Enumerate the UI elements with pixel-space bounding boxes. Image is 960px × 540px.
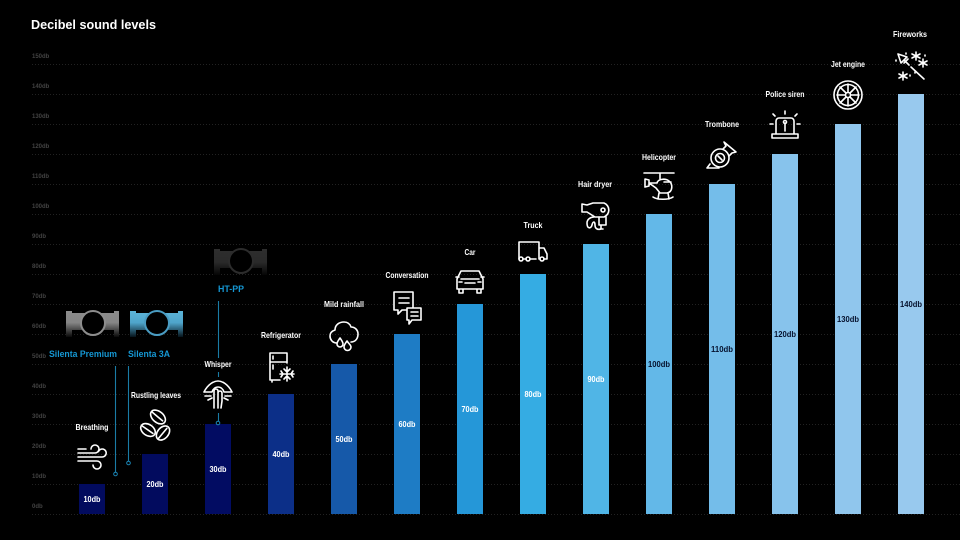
product: Silenta Premium — [49, 311, 119, 476]
item labels: Mild rainfall — [324, 299, 364, 309]
item labels: Breathing — [76, 422, 108, 432]
bar values: 40db — [272, 449, 290, 459]
item labels: Rustling leaves — [131, 390, 181, 400]
icon: rain cloud — [330, 322, 358, 350]
icon: jet engine — [834, 81, 862, 109]
icon: fridge — [270, 353, 294, 382]
bar values: 140db — [900, 299, 922, 309]
y axis grid and labels: 120db — [32, 144, 50, 150]
icon: helicopter — [644, 173, 674, 199]
y axis grid and labels: 80db — [32, 264, 46, 270]
y axis grid and labels: 60db — [32, 324, 46, 330]
item labels: Refrigerator — [261, 330, 302, 340]
y axis grid and labels: 20db — [32, 444, 46, 450]
y axis grid and labels: 0db — [32, 504, 43, 510]
y axis grid and labels: 100db — [32, 204, 50, 210]
y axis grid and labels: 90db — [32, 234, 46, 240]
bar values: 90db — [588, 374, 604, 384]
icon: truck — [519, 242, 547, 261]
item labels: Trombone — [705, 119, 739, 129]
item labels: Conversation — [386, 270, 428, 280]
bars — [79, 94, 924, 514]
bar values: 110db — [711, 344, 733, 354]
icon: conversation — [394, 292, 421, 324]
item labels: Truck — [524, 220, 543, 230]
bar values — [84, 299, 922, 504]
product: Silenta Premium: Silenta Premium — [49, 349, 117, 360]
item labels — [76, 29, 927, 432]
product: HT-PP — [214, 249, 267, 425]
bar values: 120db — [774, 329, 796, 339]
product: Silenta 3A: Silenta 3A — [128, 349, 170, 360]
item labels: Fireworks — [893, 29, 927, 39]
y axis grid and labels: 40db — [32, 384, 46, 390]
icon: breath wind — [78, 445, 106, 469]
bar values: 60db — [398, 419, 416, 429]
y axis grid and labels: 130db — [32, 114, 50, 120]
product: HT-PP: HT-PP — [218, 284, 245, 295]
icon: leaves — [138, 407, 172, 443]
bar values: 30db — [210, 464, 226, 474]
icon: whisper — [204, 381, 232, 408]
product: Silenta 3A — [127, 311, 183, 465]
icon: hair dryer — [582, 203, 609, 229]
bar values: 100db — [648, 359, 670, 369]
bar values: 70db — [462, 404, 478, 414]
y axis grid and labels: 50db — [32, 354, 46, 360]
bar values: 10db — [84, 494, 100, 504]
icon: police siren — [770, 111, 800, 138]
item labels: Police siren — [766, 89, 804, 99]
bar values: 50db — [336, 434, 352, 444]
title: Decibel sound levels — [31, 17, 156, 32]
bar values: 130db — [837, 314, 859, 324]
y axis grid and labels: 140db — [32, 84, 50, 90]
item labels: Jet engine — [831, 59, 865, 69]
icon: fireworks — [896, 52, 927, 80]
y axis grid and labels: 10db — [32, 474, 46, 480]
item labels: Hair dryer — [578, 179, 613, 189]
item labels: Helicopter — [642, 152, 677, 162]
y axis grid and labels: 70db — [32, 294, 46, 300]
bar values: 80db — [524, 389, 542, 399]
icon: trombone — [707, 142, 736, 168]
y axis grid and labels: 110db — [32, 174, 49, 180]
y axis grid and labels: 150db — [32, 54, 50, 60]
item labels: Whisper — [204, 359, 232, 369]
bar values: 20db — [146, 479, 164, 489]
y axis grid and labels: 30db — [32, 414, 46, 420]
icon: car — [456, 271, 484, 293]
item labels: Car — [464, 247, 476, 257]
